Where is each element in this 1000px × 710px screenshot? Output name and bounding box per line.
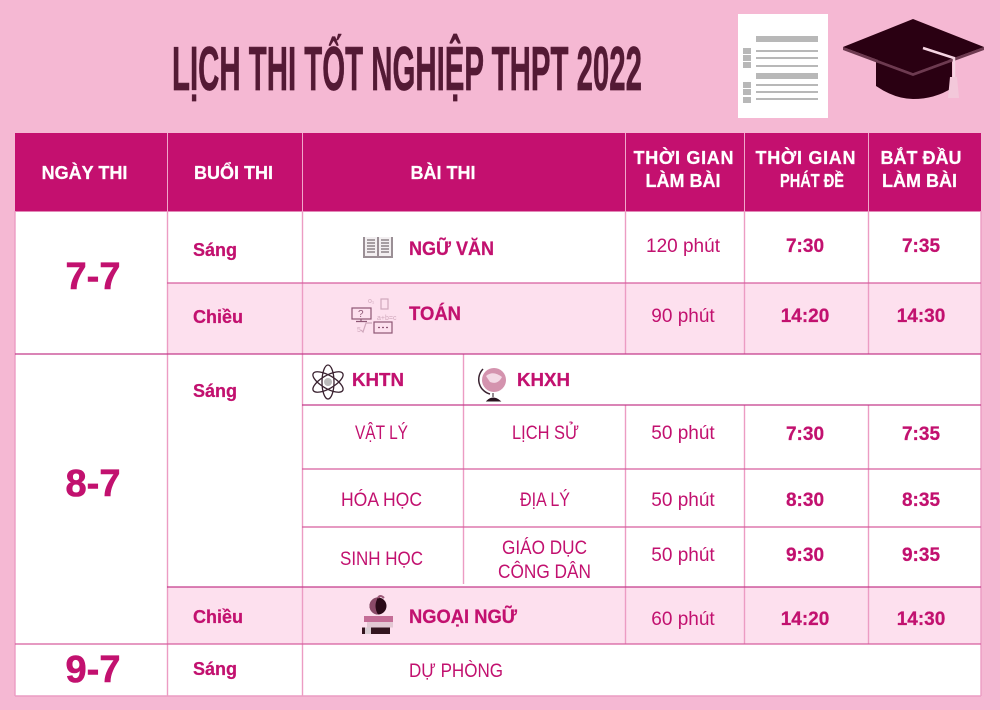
paper distribution times: 14:20 — [781, 306, 829, 327]
session labels: Sáng — [193, 381, 237, 401]
icon: maths — [352, 298, 397, 334]
date 7-7: 7-7 — [66, 256, 120, 298]
panel: table header: PHÁT ĐỀ — [780, 170, 844, 191]
icon: books and apple — [362, 596, 393, 634]
panel: table header — [15, 133, 981, 212]
session labels: Sáng — [193, 659, 237, 679]
table — [15, 133, 981, 696]
paper distribution times: 14:20 — [781, 609, 829, 630]
icon: maths: a+b=c — [377, 315, 397, 322]
subject: KHXH: KHXH — [517, 370, 570, 390]
subject names: ĐỊA LÝ — [520, 490, 570, 511]
start times — [897, 236, 945, 630]
panel: table header: NGÀY THI — [42, 162, 127, 183]
panel: table header: LÀM BÀI — [882, 170, 957, 191]
icon: book — [363, 237, 393, 258]
icon: globe — [479, 368, 506, 401]
start times: 8:35 — [902, 490, 940, 511]
icon: atom — [310, 365, 346, 399]
icon: graduation cap — [843, 19, 984, 99]
subject: Toán: TOÁN — [409, 303, 461, 325]
start times: 14:30 — [897, 609, 945, 630]
panel: table header: BUỔI THI — [194, 162, 273, 183]
subject names: SINH HỌC — [340, 549, 423, 570]
panel: afternoon row 8-7 — [167, 587, 981, 644]
panel: table header: THỜI GIAN — [634, 147, 734, 168]
subject names: HÓA HỌC — [341, 489, 422, 511]
subject: Ngữ văn: NGỮ VĂN — [409, 238, 494, 260]
subject names: LỊCH SỬ — [512, 422, 579, 444]
paper distribution times: 8:30 — [786, 490, 824, 511]
session labels: Sáng — [193, 240, 237, 260]
session labels: Chiều — [193, 607, 243, 627]
paper distribution times: 7:30 — [786, 424, 824, 445]
subject: Ngoại ngữ: NGOẠI NGỮ — [409, 606, 517, 628]
subject: KHTN: KHTN — [352, 370, 404, 390]
start times: 7:35 — [902, 236, 940, 257]
subject names: VẬT LÝ — [355, 422, 408, 444]
date 8-7: 8-7 — [66, 463, 120, 505]
panel: table header: LÀM BÀI — [646, 170, 720, 191]
date 9-7: 9-7 — [66, 649, 120, 691]
panel: table header: BẮT ĐẦU — [880, 147, 962, 168]
icon: maths: 5 — [357, 327, 361, 334]
subject names: CÔNG DÂN — [498, 561, 591, 583]
start times: 9:35 — [902, 545, 940, 566]
panel: table background — [15, 211, 981, 696]
durations: 50 phút — [651, 545, 715, 566]
durations: 60 phút — [651, 609, 715, 630]
durations: 50 phút — [651, 490, 715, 511]
paper distribution times: 9:30 — [786, 545, 824, 566]
icon: maths: o₁ — [368, 298, 375, 305]
start times: 14:30 — [897, 306, 945, 327]
subject names: GIÁO DỤC — [502, 538, 587, 559]
paper distribution times: 7:30 — [786, 236, 824, 257]
subject: Dự phòng: DỰ PHÒNG — [409, 660, 503, 682]
icon: maths: ? — [358, 309, 364, 320]
panel: table header: BÀI THI — [410, 162, 476, 183]
start times: 7:35 — [902, 424, 940, 445]
session labels — [193, 240, 243, 679]
paper distribution times — [781, 236, 829, 630]
durations: 120 phút — [646, 236, 721, 257]
durations: 90 phút — [651, 306, 715, 327]
durations — [646, 236, 721, 630]
panel: afternoon row 7-7 — [167, 283, 981, 354]
panel: table header: THỜI GIAN — [756, 147, 856, 168]
session labels: Chiều — [193, 307, 243, 327]
icon: exam paper — [738, 14, 828, 118]
subject names — [340, 422, 591, 583]
durations: 50 phút — [651, 423, 715, 444]
